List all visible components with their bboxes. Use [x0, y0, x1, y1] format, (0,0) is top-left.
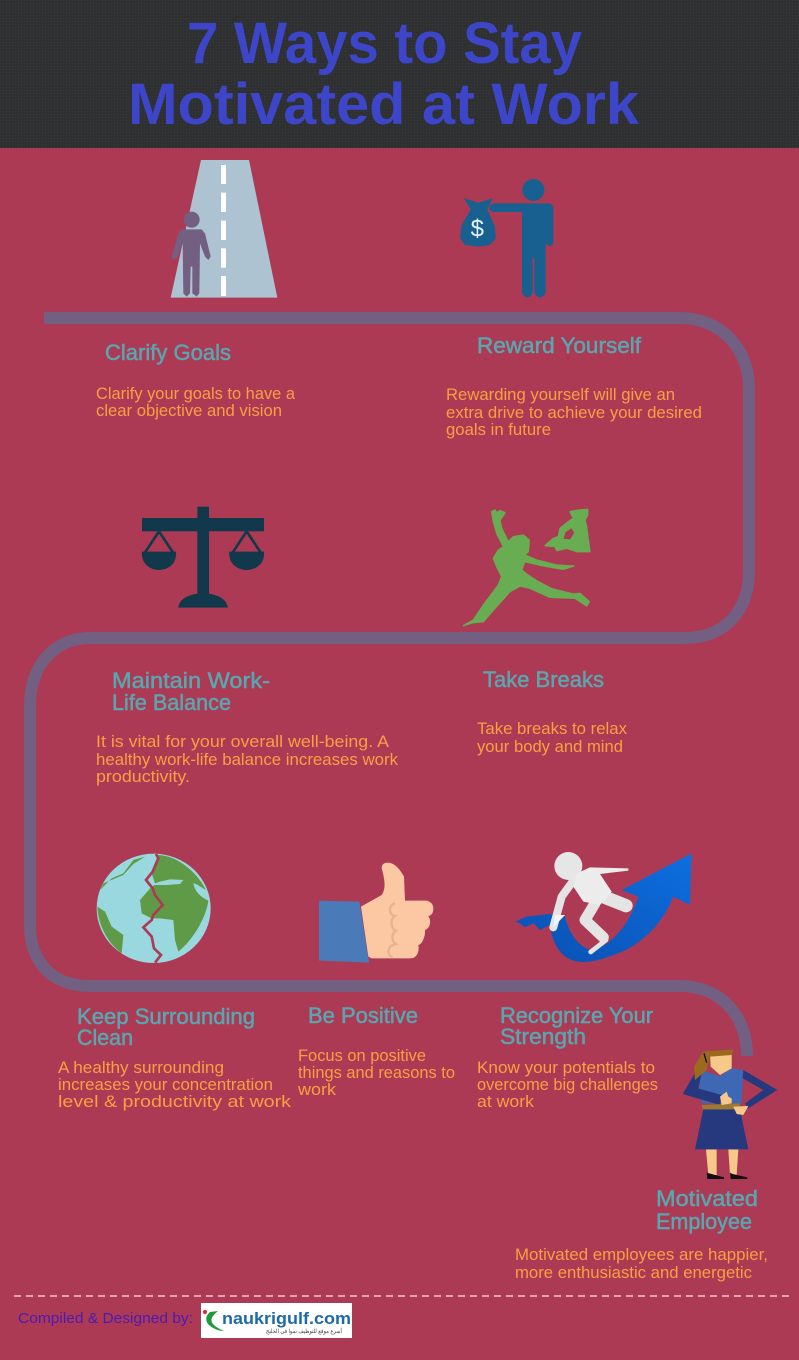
step: work-life balance: Life Balance — [112, 690, 231, 715]
step: work-life balance: Maintain Work- — [112, 668, 270, 693]
step: work-life balance — [96, 668, 398, 786]
step: work-life balance: It is vital for your overall well-being. A — [96, 732, 390, 751]
title: Motivated at Work — [128, 72, 640, 137]
step: recognize your strength: at work — [477, 1092, 535, 1111]
step: be positive: things and reasons to — [298, 1063, 455, 1082]
header band — [0, 0, 799, 148]
icon: balance scale — [142, 507, 264, 608]
logo: naukrigulf: أسرع موقع للتوظيف نموا في الخليج — [266, 1326, 342, 1335]
step: be positive: Focus on positive — [298, 1046, 426, 1065]
step: reward yourself: goals in future — [446, 420, 551, 439]
step: motivated employee — [515, 1186, 768, 1282]
icon: road with person — [171, 160, 277, 298]
credit text: Compiled & Designed by: — [18, 1310, 193, 1327]
icon: person holding money bag — [460, 179, 553, 297]
step: clarify goals: clear objective and vision — [96, 401, 282, 420]
step: recognize your strength: Know your potentials to — [477, 1058, 655, 1077]
step: keep surrounding clean: level & productivity at work — [58, 1092, 292, 1111]
logo: naukrigulf: naukrigulf.com — [222, 1309, 351, 1328]
step: take breaks: your body and mind — [477, 737, 623, 756]
step: motivated employee: Motivated — [656, 1186, 758, 1211]
step: keep surrounding clean: Keep Surrounding — [77, 1004, 255, 1029]
step: motivated employee: Motivated employees are happier, — [515, 1245, 768, 1264]
step: recognize your strength: Strength — [500, 1024, 586, 1049]
step: recognize your strength: overcome big challenges — [477, 1075, 658, 1094]
step: be positive: Be Positive — [308, 1003, 418, 1028]
step: reward yourself — [446, 333, 702, 439]
step: clarify goals: Clarify Goals — [105, 340, 231, 365]
step: recognize your strength — [477, 1003, 658, 1111]
step: work-life balance: healthy work-life balance increases work — [96, 750, 398, 769]
step: reward yourself: extra drive to achieve your desired — [446, 403, 702, 422]
step: take breaks — [477, 667, 627, 756]
step: be positive — [297, 1003, 455, 1099]
step: be positive: work — [297, 1080, 337, 1099]
step: keep surrounding clean — [58, 1004, 292, 1111]
title — [128, 11, 640, 137]
step: clarify goals: Clarify your goals to have a — [96, 384, 296, 403]
step: motivated employee: more enthusiastic and energetic — [515, 1263, 752, 1282]
step: keep surrounding clean: increases your concentration — [58, 1075, 273, 1094]
title: 7 Ways to Stay — [187, 11, 582, 76]
icon: cracked globe — [97, 854, 211, 963]
icon: person holding money bag: $ — [471, 216, 484, 243]
logo: naukrigulf — [201, 1303, 352, 1338]
step: keep surrounding clean: A healthy surrounding — [58, 1058, 224, 1077]
step: work-life balance: productivity. — [96, 767, 190, 786]
step: motivated employee: Employee — [656, 1209, 752, 1234]
step: keep surrounding clean: Clean — [77, 1025, 133, 1050]
icon: motivated employee — [683, 1049, 777, 1179]
step: recognize your strength: Recognize Your — [500, 1003, 653, 1028]
step: reward yourself: Rewarding yourself will give an — [446, 385, 675, 404]
winding path — [30, 318, 749, 1056]
step: take breaks: Take breaks to relax — [477, 719, 627, 738]
icon: figure surfing blue arrow — [515, 852, 692, 962]
step: reward yourself: Reward Yourself — [477, 333, 642, 358]
icon: thumbs up — [319, 863, 433, 963]
step: clarify goals — [96, 340, 296, 420]
step: take breaks: Take Breaks — [483, 667, 604, 692]
icon: leaping figures — [463, 509, 590, 626]
